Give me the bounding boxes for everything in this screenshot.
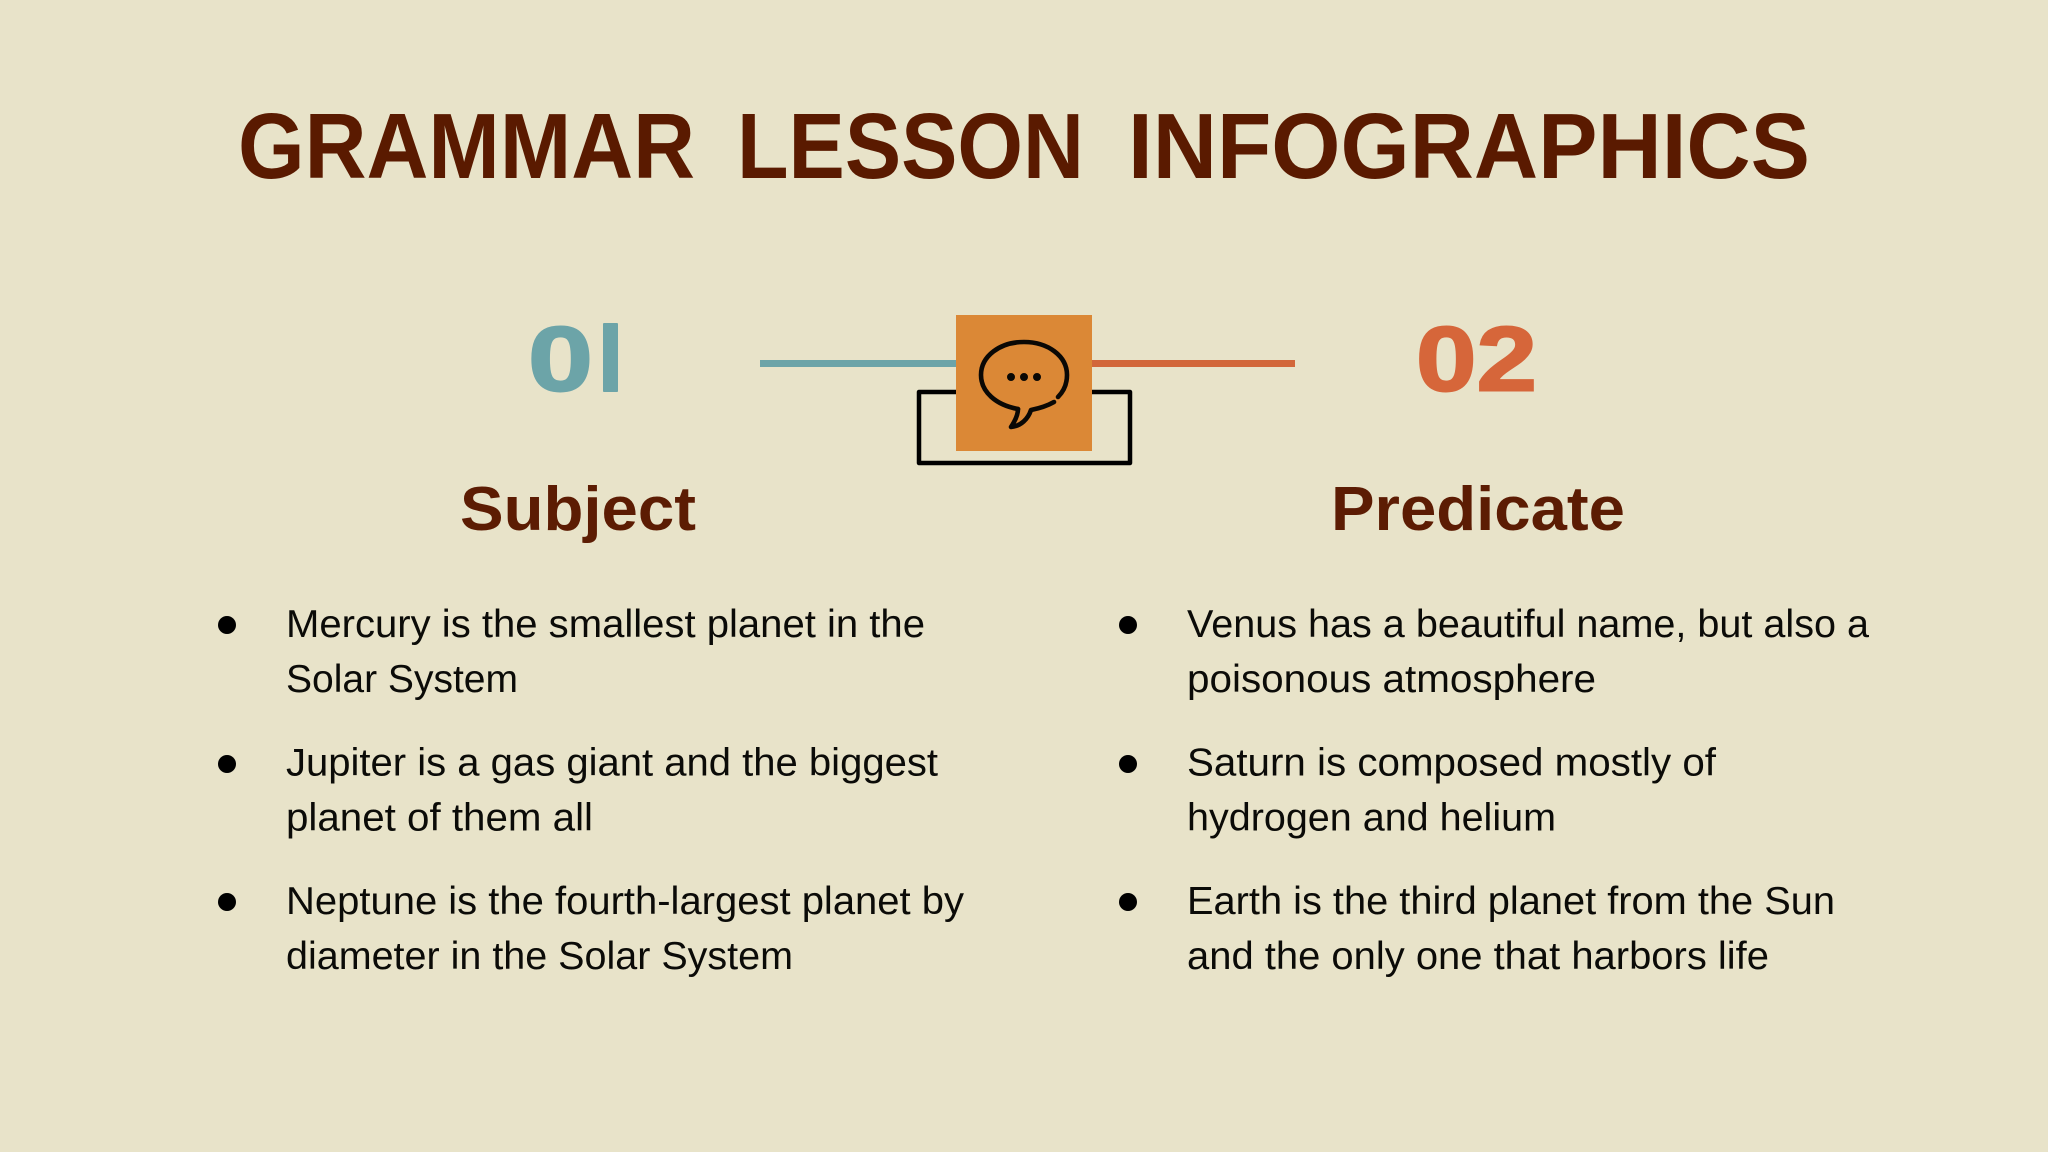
- bullet: Saturn: [1119, 742, 1716, 840]
- bullet: Venus: [1119, 603, 1869, 701]
- connector line: teal: [760, 360, 958, 367]
- bullet: Venus: Venus has a beautiful name, but also a: [1187, 603, 1869, 646]
- number 02: 02: [1416, 308, 1537, 410]
- orange icon square: [956, 315, 1092, 451]
- bullet: Neptune: Neptune is the fourth-largest planet by: [286, 880, 965, 923]
- bullet: Saturn: Saturn is composed mostly of: [1187, 742, 1716, 784]
- number 01: [531, 323, 618, 392]
- bullet: Mercury: Solar System: [286, 658, 518, 701]
- connector line: orange: [1090, 360, 1295, 367]
- right bullet list: [1119, 603, 1869, 978]
- bullet: Mercury: [218, 603, 925, 701]
- icon: speech bubble: [981, 342, 1067, 427]
- bullet: Venus: poisonous atmosphere: [1187, 658, 1596, 701]
- title: LESSON: [737, 94, 1084, 198]
- bullet: Neptune: [218, 880, 965, 978]
- bullet: Jupiter: [218, 742, 938, 840]
- title: GRAMMAR: [238, 94, 695, 198]
- bullet: Jupiter: Jupiter is a gas giant and the biggest: [286, 742, 938, 784]
- left bullet list: [218, 603, 965, 978]
- bullet: Saturn: hydrogen and helium: [1187, 796, 1556, 840]
- heading: Subject: Subject: [460, 475, 696, 544]
- title: [238, 94, 1810, 198]
- bullet: Earth: and the only one that harbors life: [1187, 935, 1769, 978]
- black outlined rectangle: [919, 392, 1130, 463]
- bullet: Earth: [1119, 880, 1835, 978]
- bullet: Mercury: Mercury is the smallest planet in the: [286, 603, 925, 646]
- bullet: Jupiter: planet of them all: [286, 796, 593, 840]
- number 01: 01: [528, 308, 650, 411]
- bullet: Earth: Earth is the third planet from the Sun: [1187, 880, 1835, 923]
- title: INFOGRAPHICS: [1128, 94, 1810, 198]
- heading: Predicate: Predicate: [1331, 475, 1625, 544]
- bullet: Neptune: diameter in the Solar System: [286, 935, 793, 978]
